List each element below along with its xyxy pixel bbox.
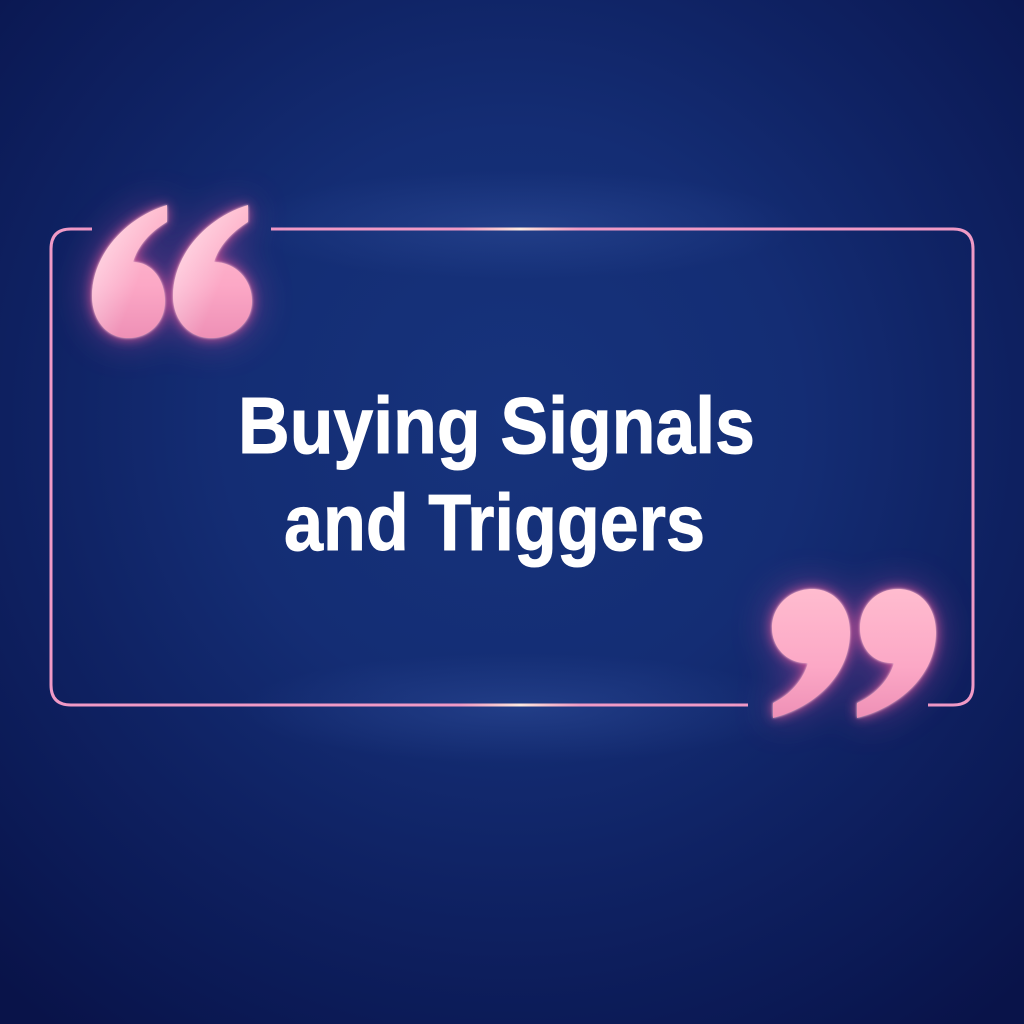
title: Buying Signals <box>238 381 755 470</box>
title <box>238 381 755 567</box>
frame: rounded pink border with gaps for the quote marks <box>51 229 973 705</box>
icon: opening quotation marks <box>92 205 252 338</box>
soft glow behind frame lines <box>240 170 800 763</box>
title: and Triggers <box>284 478 705 567</box>
icon: closing quotation marks <box>772 589 936 718</box>
light flares on frame <box>460 228 580 706</box>
